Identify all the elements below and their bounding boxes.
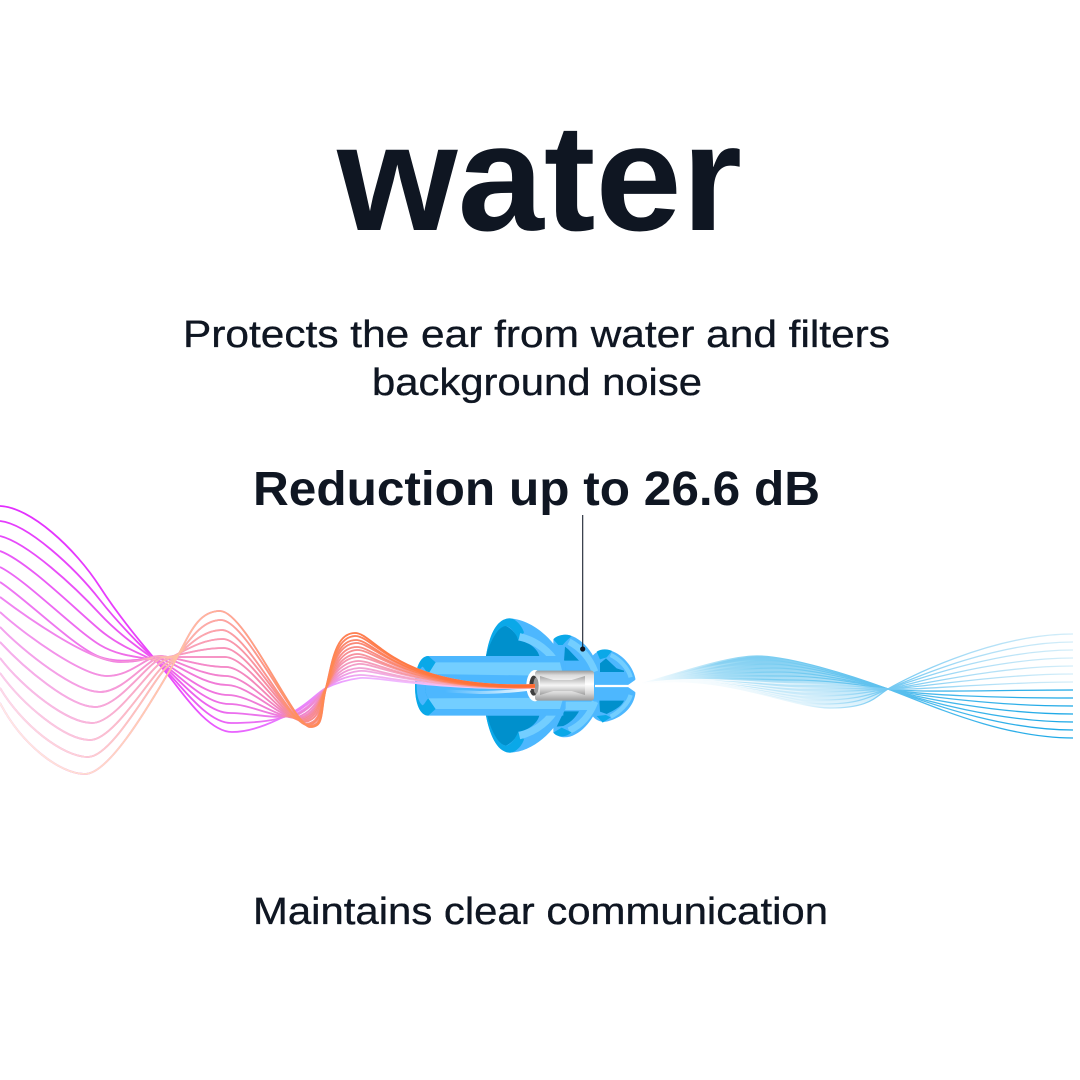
second flange	[553, 635, 600, 737]
description text	[183, 314, 890, 404]
white halo under incoming wave	[445, 689, 531, 692]
right blue sound wave	[638, 634, 1073, 738]
leader line with dot	[580, 515, 585, 652]
third flange	[590, 649, 635, 723]
description text: background noise	[372, 362, 702, 404]
description text: Protects the ear from water and filters	[183, 314, 890, 356]
title: water	[336, 93, 742, 263]
left sound wave	[0, 506, 535, 774]
silver nozzle	[526, 670, 594, 701]
noise reduction heading: Reduction up to 26.6 dB	[253, 463, 820, 516]
earplug	[415, 618, 636, 753]
bottom caption: Maintains clear communication	[253, 891, 828, 933]
stem	[415, 656, 563, 716]
main flange	[486, 618, 566, 753]
slit	[595, 682, 635, 689]
